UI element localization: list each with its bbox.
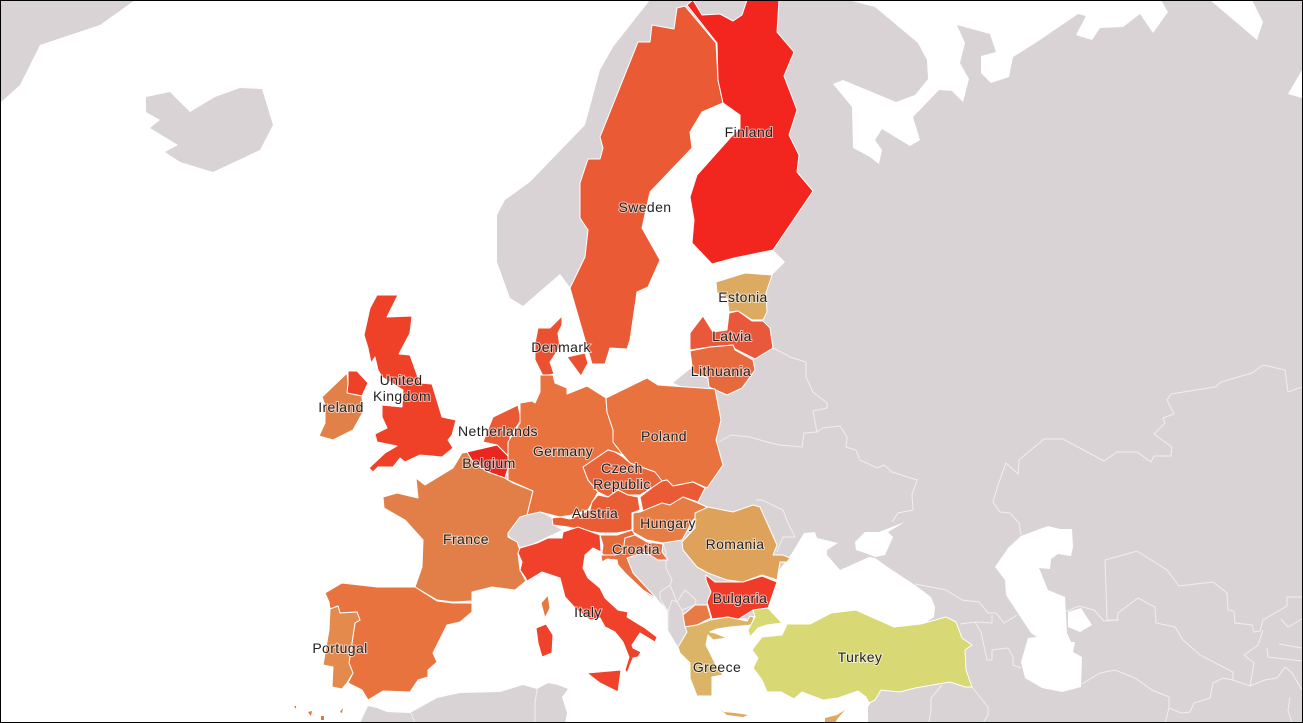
label: Finland: Finland xyxy=(725,124,773,140)
country: Lithuania xyxy=(690,345,755,395)
country: Spain xyxy=(294,583,472,720)
land: Switzerland xyxy=(508,512,562,547)
land: Luxembourg xyxy=(504,470,512,482)
land: Norway, Russia, Central Asia, Balkans xyxy=(497,0,1303,723)
label: Italy: Italy xyxy=(574,604,602,620)
label: Netherlands: Netherlands xyxy=(458,423,538,439)
country: Slovakia xyxy=(640,480,705,512)
label: Poland: Poland xyxy=(641,428,687,444)
label: Austria: Austria xyxy=(572,505,618,521)
country: Poland xyxy=(606,378,723,488)
label: United Kingdom xyxy=(373,372,431,404)
label: United Kingdom: Kingdom xyxy=(373,388,431,404)
label: Greece: Greece xyxy=(693,659,741,675)
country: Croatia xyxy=(601,535,668,599)
sea: Kara-Bogaz xyxy=(1068,608,1092,632)
country: Portugal xyxy=(323,606,360,689)
country: Romania xyxy=(682,505,790,582)
label: Croatia: Croatia xyxy=(612,541,660,557)
label: Turkey: Turkey xyxy=(838,649,882,665)
label: United Kingdom: United xyxy=(380,372,422,388)
label: Denmark: Denmark xyxy=(531,339,591,355)
country: Netherlands xyxy=(483,405,521,457)
label: Hungary: Hungary xyxy=(640,515,696,531)
country: Denmark xyxy=(535,316,588,376)
label: Estonia: Estonia xyxy=(718,289,768,305)
country: Finland xyxy=(687,0,813,264)
country: Corsica xyxy=(541,595,550,618)
country: Italy xyxy=(518,527,657,692)
country: Hungary xyxy=(633,497,707,543)
country: Belgium xyxy=(467,445,509,478)
land: Iceland xyxy=(146,88,273,172)
sea: Arctic inlet xyxy=(1288,70,1302,98)
country: Cyprus xyxy=(825,710,845,723)
label: France: France xyxy=(443,531,489,547)
label: Romania: Romania xyxy=(706,536,764,552)
country labels xyxy=(312,124,882,675)
country: Slovenia xyxy=(600,530,635,557)
label: Sweden: Sweden xyxy=(618,199,672,215)
country: United Kingdom xyxy=(347,295,456,472)
sea: Azov xyxy=(855,522,905,557)
sea: Caspian xyxy=(995,526,1082,692)
country: Sweden xyxy=(570,6,723,364)
label: Czech Republic: Republic xyxy=(593,476,651,492)
countries coloured by value xyxy=(294,0,972,723)
label: Belgium: Belgium xyxy=(462,455,516,471)
country: Latvia xyxy=(690,311,773,359)
country: Germany xyxy=(508,375,623,517)
label: Bulgaria: Bulgaria xyxy=(713,590,767,606)
country: Bulgaria xyxy=(706,575,777,620)
country: Ireland xyxy=(319,373,363,440)
country: France xyxy=(383,452,533,602)
land: North Africa xyxy=(360,683,568,723)
label: Germany: Germany xyxy=(533,443,593,459)
country: Turkey xyxy=(748,608,972,703)
country: Czech Republic xyxy=(583,450,662,497)
label: Latvia: Latvia xyxy=(712,328,752,344)
country: North Macedonia xyxy=(683,605,711,627)
sea: Black Sea xyxy=(750,532,935,640)
label: Portugal: Portugal xyxy=(312,640,368,656)
country: Estonia xyxy=(716,273,772,320)
land: Greenland xyxy=(0,0,135,103)
country: Austria xyxy=(552,490,640,533)
country: Greece xyxy=(678,616,754,717)
borders of non-data countries xyxy=(411,348,1302,723)
label: Ireland: Ireland xyxy=(318,399,364,415)
inland seas xyxy=(750,70,1302,692)
label: Lithuania: Lithuania xyxy=(691,363,751,379)
label: Czech Republic: Czech xyxy=(601,460,643,476)
label: Czech Republic xyxy=(593,460,651,492)
